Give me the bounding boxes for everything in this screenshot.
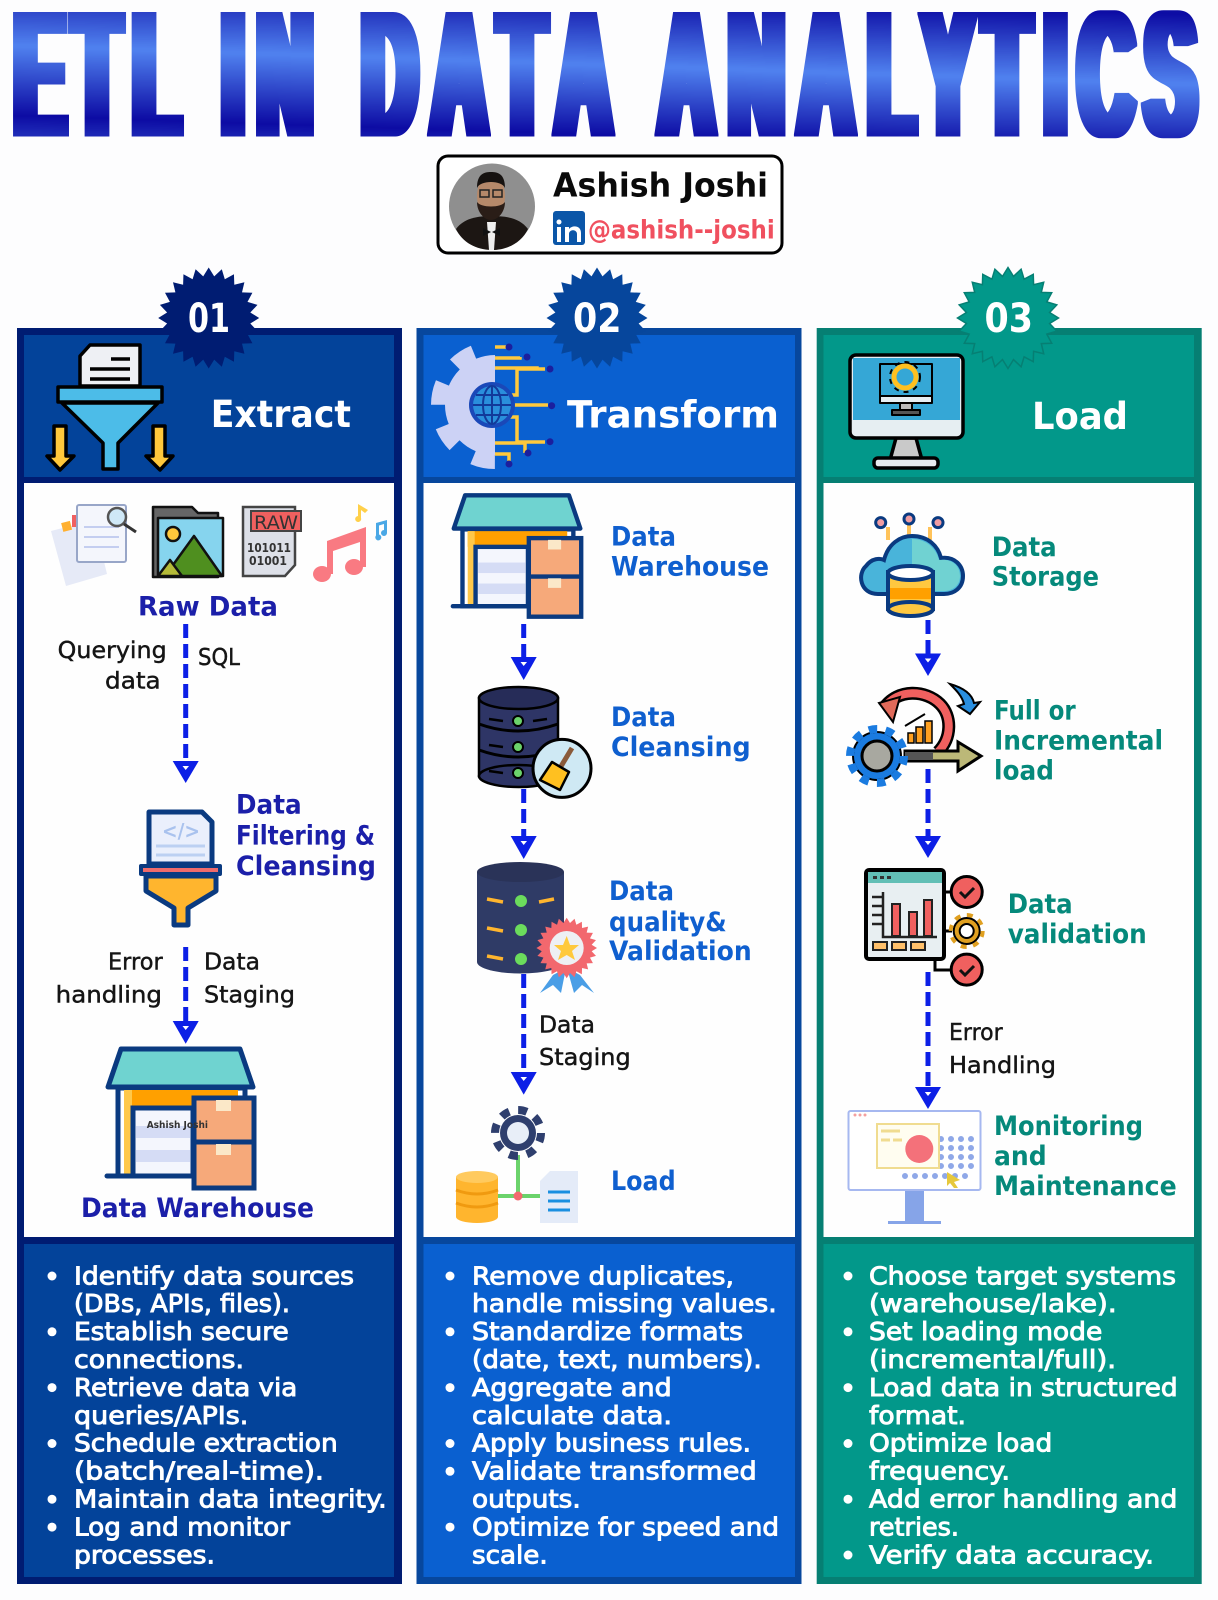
heading: load: Load (1032, 395, 1128, 438)
icon: linkedin (553, 211, 585, 245)
text block: extract bullets: (batch/real-time). (74, 1457, 324, 1486)
icon: incremental load (850, 684, 981, 783)
text block: extract bullets: processes. (74, 1540, 215, 1569)
text block: extract bullets: queries/APIs. (74, 1401, 248, 1430)
heading: data filtering and cleansing: Data (236, 790, 302, 820)
icon: image folder (153, 507, 223, 577)
heading: monitoring and maintenance: Maintenance (994, 1171, 1177, 1202)
icon: warehouse (107, 1049, 254, 1188)
labels: error handling (56, 948, 163, 1008)
heading: data filtering and cleansing: Filtering & (236, 820, 375, 852)
heading: data warehouse: Data Warehouse (81, 1193, 314, 1224)
text block: extract bullets: Retrieve data via (74, 1373, 297, 1402)
heading: data validation: validation (1008, 919, 1147, 950)
label: sql: SQL (198, 643, 240, 671)
icon: validation dashboard (866, 870, 983, 985)
text block: transform bullets: Remove duplicates, (472, 1261, 734, 1290)
text block: transform bullets: handle missing values. (472, 1289, 777, 1318)
arrow: validation to monitoring (915, 972, 941, 1109)
arrow: filtering to warehouse (173, 947, 199, 1044)
heading: data warehouse: Warehouse (611, 552, 769, 582)
icon: raw file: 01001 (249, 554, 287, 568)
arrow: quality to load (511, 974, 537, 1095)
heading: load: Load (611, 1166, 676, 1197)
text block: load bullets: Verify data accuracy. (869, 1540, 1154, 1569)
heading: data cleansing (611, 702, 751, 763)
icon: funnel with document (47, 345, 173, 470)
heading: full or incremental load (994, 696, 1163, 787)
heading: data filtering and cleansing (236, 790, 376, 882)
icon: database with award (477, 862, 597, 993)
heading: data validation: Data (1008, 889, 1073, 920)
icon: database with brush (479, 687, 591, 797)
text block: transform bullets: scale. (472, 1540, 548, 1569)
heading: data warehouse (611, 521, 769, 582)
linkedin handle: @ashish--joshi (588, 215, 775, 245)
labels: data staging: Data (204, 948, 260, 976)
panel: transform (416, 328, 802, 1584)
labels: data staging: Staging (539, 1043, 631, 1071)
text block: load bullets: retries. (869, 1512, 959, 1541)
text block: load bullets: frequency. (869, 1457, 1010, 1486)
heading: extract: Extract (211, 393, 351, 436)
heading: monitoring and maintenance (994, 1111, 1177, 1202)
text block: extract bullets: connections. (74, 1345, 244, 1374)
text block: extract bullets: Log and monitor (74, 1512, 291, 1541)
labels: error handling: Error (108, 948, 163, 976)
heading: raw data: Raw Data (138, 592, 278, 623)
text block: load bullets: (incremental/full). (869, 1345, 1116, 1374)
labels: data staging: Staging (204, 980, 295, 1008)
icon: music notes (313, 504, 387, 582)
icon: warehouse: Ashish Joshi (147, 1120, 208, 1131)
heading: data quality and validation: Data (609, 876, 674, 907)
icon: author photo (449, 164, 535, 250)
heading: transform: Transform (567, 394, 779, 437)
arrow: raw data to filtering (173, 624, 199, 783)
text block: extract bullets: Establish secure (74, 1317, 289, 1346)
text block: load bullets: Optimize load (869, 1429, 1052, 1458)
text block: load bullets: Add error handling and (869, 1484, 1177, 1514)
text block: load bullets: (warehouse/lake). (869, 1289, 1117, 1318)
author name: Ashish Joshi (553, 166, 768, 205)
labels: querying data (58, 636, 167, 694)
heading: data filtering and cleansing: Cleansing (236, 851, 376, 882)
heading: data cleansing: Data (611, 702, 676, 733)
badge: 02: 02 (573, 296, 622, 342)
labels: querying data: data (105, 666, 161, 694)
text block: transform bullets: Optimize for speed and (472, 1512, 779, 1541)
text block: transform bullets: Apply business rules. (472, 1429, 751, 1458)
labels: error handling: Error (949, 1018, 1003, 1046)
labels: querying data: Querying (58, 636, 167, 664)
heading: data storage (992, 532, 1099, 593)
text block: transform bullets: calculate data. (472, 1401, 672, 1430)
text block: extract bullets: (DBs, APIs, files). (74, 1289, 290, 1318)
text block: transform bullets: (date, text, numbers). (472, 1345, 762, 1374)
icon: desktop monitor with gear (850, 355, 963, 468)
text block: load bullets: format. (869, 1401, 966, 1430)
icon: code filter: </> (162, 819, 200, 843)
text block: transform bullets (446, 1261, 779, 1569)
raw data icons (51, 504, 387, 586)
text block: extract bullets (48, 1261, 387, 1569)
text block: load bullets (844, 1261, 1178, 1569)
icon: gear globe circuit (439, 344, 555, 468)
text block: extract bullets: Schedule extraction (74, 1429, 338, 1458)
heading: data quality and validation: quality& (609, 907, 727, 938)
labels: data staging: Data (539, 1011, 595, 1039)
text block: extract bullets: Identify data sources (74, 1261, 354, 1290)
icon: load network (456, 1110, 578, 1223)
icon: raw file: 101011 (247, 541, 291, 555)
heading: monitoring and maintenance: Monitoring (994, 1111, 1143, 1142)
labels: error handling (949, 1018, 1056, 1079)
heading: data cleansing: Cleansing (611, 732, 751, 763)
badge: 01 (158, 268, 259, 368)
icon: raw file (243, 507, 301, 576)
panel: extract (17, 328, 402, 1584)
text block: extract bullets: Maintain data integrity. (74, 1484, 387, 1514)
text block: transform bullets: Validate transformed (472, 1457, 757, 1486)
labels: error handling: Handling (949, 1051, 1056, 1079)
badge: 01: 01 (188, 296, 230, 342)
icon: cloud storage (861, 514, 963, 616)
heading: full or incremental load: Full or (994, 696, 1076, 726)
heading: full or incremental load: load (994, 756, 1054, 787)
icon: code filter (141, 812, 220, 925)
badge: 02 (546, 268, 648, 368)
heading: monitoring and maintenance: and (994, 1141, 1047, 1172)
arrow: cleansing to quality (511, 789, 537, 859)
badge: 03: 03 (984, 296, 1033, 342)
heading: data storage: Storage (992, 562, 1099, 593)
labels: error handling: handling (56, 980, 162, 1008)
arrow: load mode to validation (915, 769, 941, 858)
labels: data staging (204, 948, 295, 1008)
labels: data staging (539, 1011, 631, 1071)
text block: transform bullets: Standardize formats (472, 1317, 743, 1346)
icon: documents (51, 505, 136, 586)
heading: data storage: Data (992, 532, 1057, 563)
heading: data validation (1008, 889, 1147, 950)
panel: load (817, 328, 1202, 1584)
icon: warehouse (453, 495, 581, 617)
icon: raw file: RAW (254, 512, 298, 534)
badge: 03 (958, 268, 1058, 368)
icon: monitoring screen (848, 1111, 980, 1224)
heading: data quality and validation (609, 876, 752, 967)
heading: full or incremental load: Incremental (994, 726, 1163, 756)
arrow: storage to load mode (915, 620, 941, 676)
text block: transform bullets: Aggregate and (472, 1373, 672, 1402)
author card (438, 156, 782, 253)
text block: load bullets: Load data in structured (869, 1373, 1178, 1402)
text block: load bullets: Choose target systems (869, 1261, 1176, 1290)
heading: data quality and validation: Validation (609, 936, 752, 967)
text block: transform bullets: outputs. (472, 1484, 581, 1514)
heading: data warehouse: Data (611, 521, 676, 552)
arrow: warehouse to cleansing (511, 624, 537, 680)
text block: load bullets: Set loading mode (869, 1317, 1102, 1346)
